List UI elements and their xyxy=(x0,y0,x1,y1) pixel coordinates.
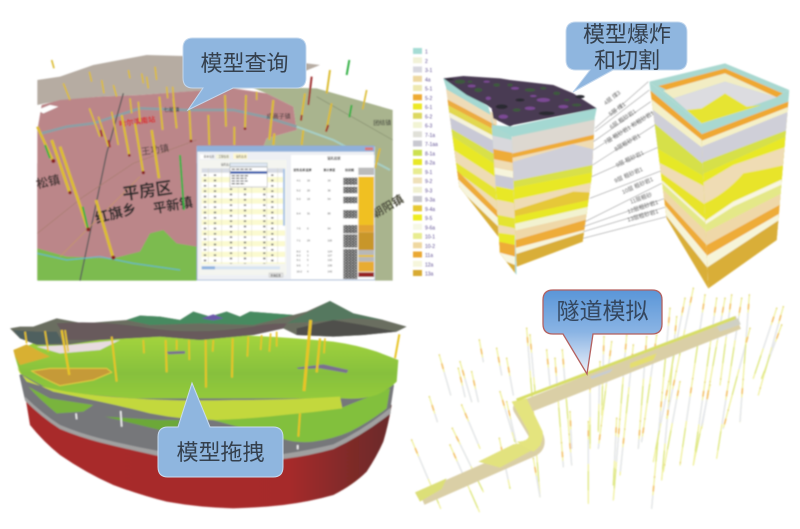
borehole column result: 20 xyxy=(307,189,310,193)
stratum labels xyxy=(602,89,659,224)
borehole column result: 5-2 xyxy=(297,189,301,193)
callout: model query: 模型查询 xyxy=(200,51,289,76)
stratum legend: 3-1 xyxy=(425,68,432,74)
stratum legend: 9-3a xyxy=(425,198,435,204)
gold patches xyxy=(32,368,112,386)
borehole column result: 钻孔柱状 xyxy=(327,156,341,161)
cut-open strata box xyxy=(647,63,793,290)
stratum legend: 1 xyxy=(425,50,428,56)
window tabs xyxy=(200,153,247,159)
stratum labels: 12层粗砂岩1 xyxy=(626,198,659,216)
window tabs: 工程信息 xyxy=(218,155,229,159)
borehole column result: 岩性名称 xyxy=(293,167,305,172)
borehole column result: 36 xyxy=(328,189,331,193)
boreholes xyxy=(25,320,399,437)
stratum legend: 7-1aa xyxy=(425,142,438,148)
surface imagery xyxy=(443,76,597,127)
stratum legend: 5-2 xyxy=(425,96,432,102)
stratum legend: 8-1a xyxy=(425,151,435,157)
borehole column result: 127 xyxy=(328,254,333,258)
borehole column result: 132 xyxy=(328,258,333,262)
map place names: 成高子镇 xyxy=(267,112,291,120)
white-pink patches xyxy=(37,340,120,353)
stratum legend: 9-2 xyxy=(425,179,432,185)
red bottom stratum xyxy=(25,385,392,508)
map place names: 团结镇 xyxy=(373,119,391,127)
stratum legend: 9-4a xyxy=(425,207,435,213)
stratum legend: 4a xyxy=(425,77,431,83)
top terrain surface xyxy=(10,301,407,345)
stratum labels: 7层 粗砂岩1 和粗砂岩1 xyxy=(602,109,656,146)
stratum legend: 8-2a xyxy=(425,160,435,166)
borehole column result: 5 xyxy=(307,258,309,262)
map place names: 平新镇 xyxy=(152,194,194,216)
callout: model explosion and cutting: 和切割 xyxy=(594,48,660,73)
dropdown list xyxy=(230,167,267,187)
borehole column result: 4-1 xyxy=(297,179,301,183)
stratum labels: 9层 粗砂岩1 xyxy=(614,149,645,169)
panel: model dragging xyxy=(10,301,407,508)
borehole column result: 柱状图 xyxy=(345,167,354,172)
stratum legend: 6-3 xyxy=(425,124,432,130)
borehole column result: 7-5 xyxy=(297,226,301,230)
stratum legend: 9-1 xyxy=(425,170,432,176)
teal top rims xyxy=(443,78,597,136)
stratum legend: 11a xyxy=(425,253,433,259)
stratum labels: 5层 煤1 xyxy=(607,100,627,118)
borehole column result: 85 xyxy=(328,211,331,215)
boreholes xyxy=(37,60,380,258)
query result window xyxy=(197,146,374,280)
callout: tunnel simulation: 隧道模拟 xyxy=(556,298,648,324)
borehole column result: 118 xyxy=(328,239,332,243)
stratum legend: 13a xyxy=(425,272,434,278)
stratum legend: 2 xyxy=(425,59,428,65)
stratum legend: 12a xyxy=(425,262,434,268)
exploded strata blocks xyxy=(440,63,793,290)
panel: tunnel simulation xyxy=(412,288,783,512)
stratum legend: 10-1 xyxy=(425,234,435,240)
stratum legend: 5-1 xyxy=(425,86,432,92)
borehole column result: 9-5 xyxy=(297,264,301,268)
tunnel xyxy=(415,318,741,502)
borehole column result: 16 xyxy=(307,179,310,183)
stratum legend: 7-1a xyxy=(425,133,435,139)
stratum labels: 8层粗砂岩1 xyxy=(613,132,642,153)
borehole column result: 6 xyxy=(307,249,309,253)
callout: model dragging: 模型拖拽 xyxy=(176,440,265,465)
window tabs: 钻孔信息 xyxy=(236,155,247,159)
stratum legend: 9-6a xyxy=(425,225,435,231)
stratum labels: 6层 粗砂岩1 xyxy=(608,107,638,131)
borehole column result: 3 xyxy=(307,254,309,258)
grey stratum xyxy=(19,352,394,459)
borehole column result: 54 xyxy=(328,197,331,201)
borehole column result: 7 xyxy=(307,264,309,268)
borehole column result: 8-2 xyxy=(297,249,301,253)
borehole list table: 钻孔信息 xyxy=(221,163,232,167)
yellow-green band xyxy=(17,367,342,420)
borehole column result: 31 xyxy=(307,211,310,215)
borehole column result: 139 xyxy=(328,264,333,268)
borehole column result: 9 xyxy=(307,226,309,230)
panel: model query map xyxy=(35,53,406,281)
stratum labels: 11层粗砂 xyxy=(629,190,653,206)
borehole column result: 143 xyxy=(328,269,333,273)
borehole column result: 6-4 xyxy=(297,211,301,215)
map place names: 红旗乡 xyxy=(93,200,138,226)
map place names: 朝阳镇 xyxy=(369,192,406,221)
stratum labels: 10层 粗砂岩1 xyxy=(621,175,655,196)
stratum legend: 6-2 xyxy=(425,114,432,120)
map place names: 王功镇 xyxy=(140,142,170,157)
borehole column result: 124 xyxy=(328,249,333,253)
callout: model query xyxy=(183,38,306,110)
stratum labels: 9层 粗砂岩1 xyxy=(613,165,644,185)
callout: model dragging xyxy=(158,383,283,477)
3D terrain map xyxy=(35,53,406,281)
map place names: 哈尔滨南站 xyxy=(118,115,157,129)
borehole column result: 10-2 xyxy=(297,269,303,273)
panel: model explosion and cutting xyxy=(413,48,793,290)
stratum legend: 9-5 xyxy=(425,216,432,222)
borehole column result: 24 xyxy=(307,239,310,243)
borehole column result: 8-3 xyxy=(297,254,301,258)
callout: tunnel simulation xyxy=(543,290,662,374)
stratum legend: 10-2 xyxy=(425,244,435,250)
stratum labels: 4层 煤3 xyxy=(602,89,622,107)
borehole column result: 5-3 xyxy=(297,197,301,201)
window tabs: 基本信息 xyxy=(204,155,215,159)
borehole column result: 16 xyxy=(328,179,331,183)
map place names: 七星镇 xyxy=(163,106,180,114)
stratum legend xyxy=(413,48,438,278)
callout: model explosion and cutting xyxy=(566,22,687,92)
connector lines xyxy=(583,82,667,238)
borehole column result: 94 xyxy=(328,226,331,230)
borehole field xyxy=(412,288,783,512)
callout: model explosion and cutting: 模型爆炸 xyxy=(583,22,671,47)
borehole column result: 7-1 xyxy=(297,239,301,243)
map place names xyxy=(35,106,406,226)
borehole column result: 9-1 xyxy=(297,258,301,262)
borehole column result: 18 xyxy=(307,197,310,201)
borehole column result: 层厚 xyxy=(306,167,312,172)
stratum legend: 6-1 xyxy=(425,105,432,111)
green main surface xyxy=(15,335,398,399)
borehole list table: 查询结果 xyxy=(270,273,281,277)
map place names: 平房区 xyxy=(121,178,173,204)
stratum labels: 13层粗砂岩1 xyxy=(626,207,659,224)
stratum legend: 9-3 xyxy=(425,188,432,194)
borehole column result: 累计厚度 xyxy=(323,167,335,172)
borehole column result: 4 xyxy=(307,269,309,273)
green lower lens xyxy=(207,388,390,442)
borehole column result xyxy=(291,155,374,279)
borehole list table xyxy=(199,160,287,277)
map place names: 松镇 xyxy=(35,172,61,191)
